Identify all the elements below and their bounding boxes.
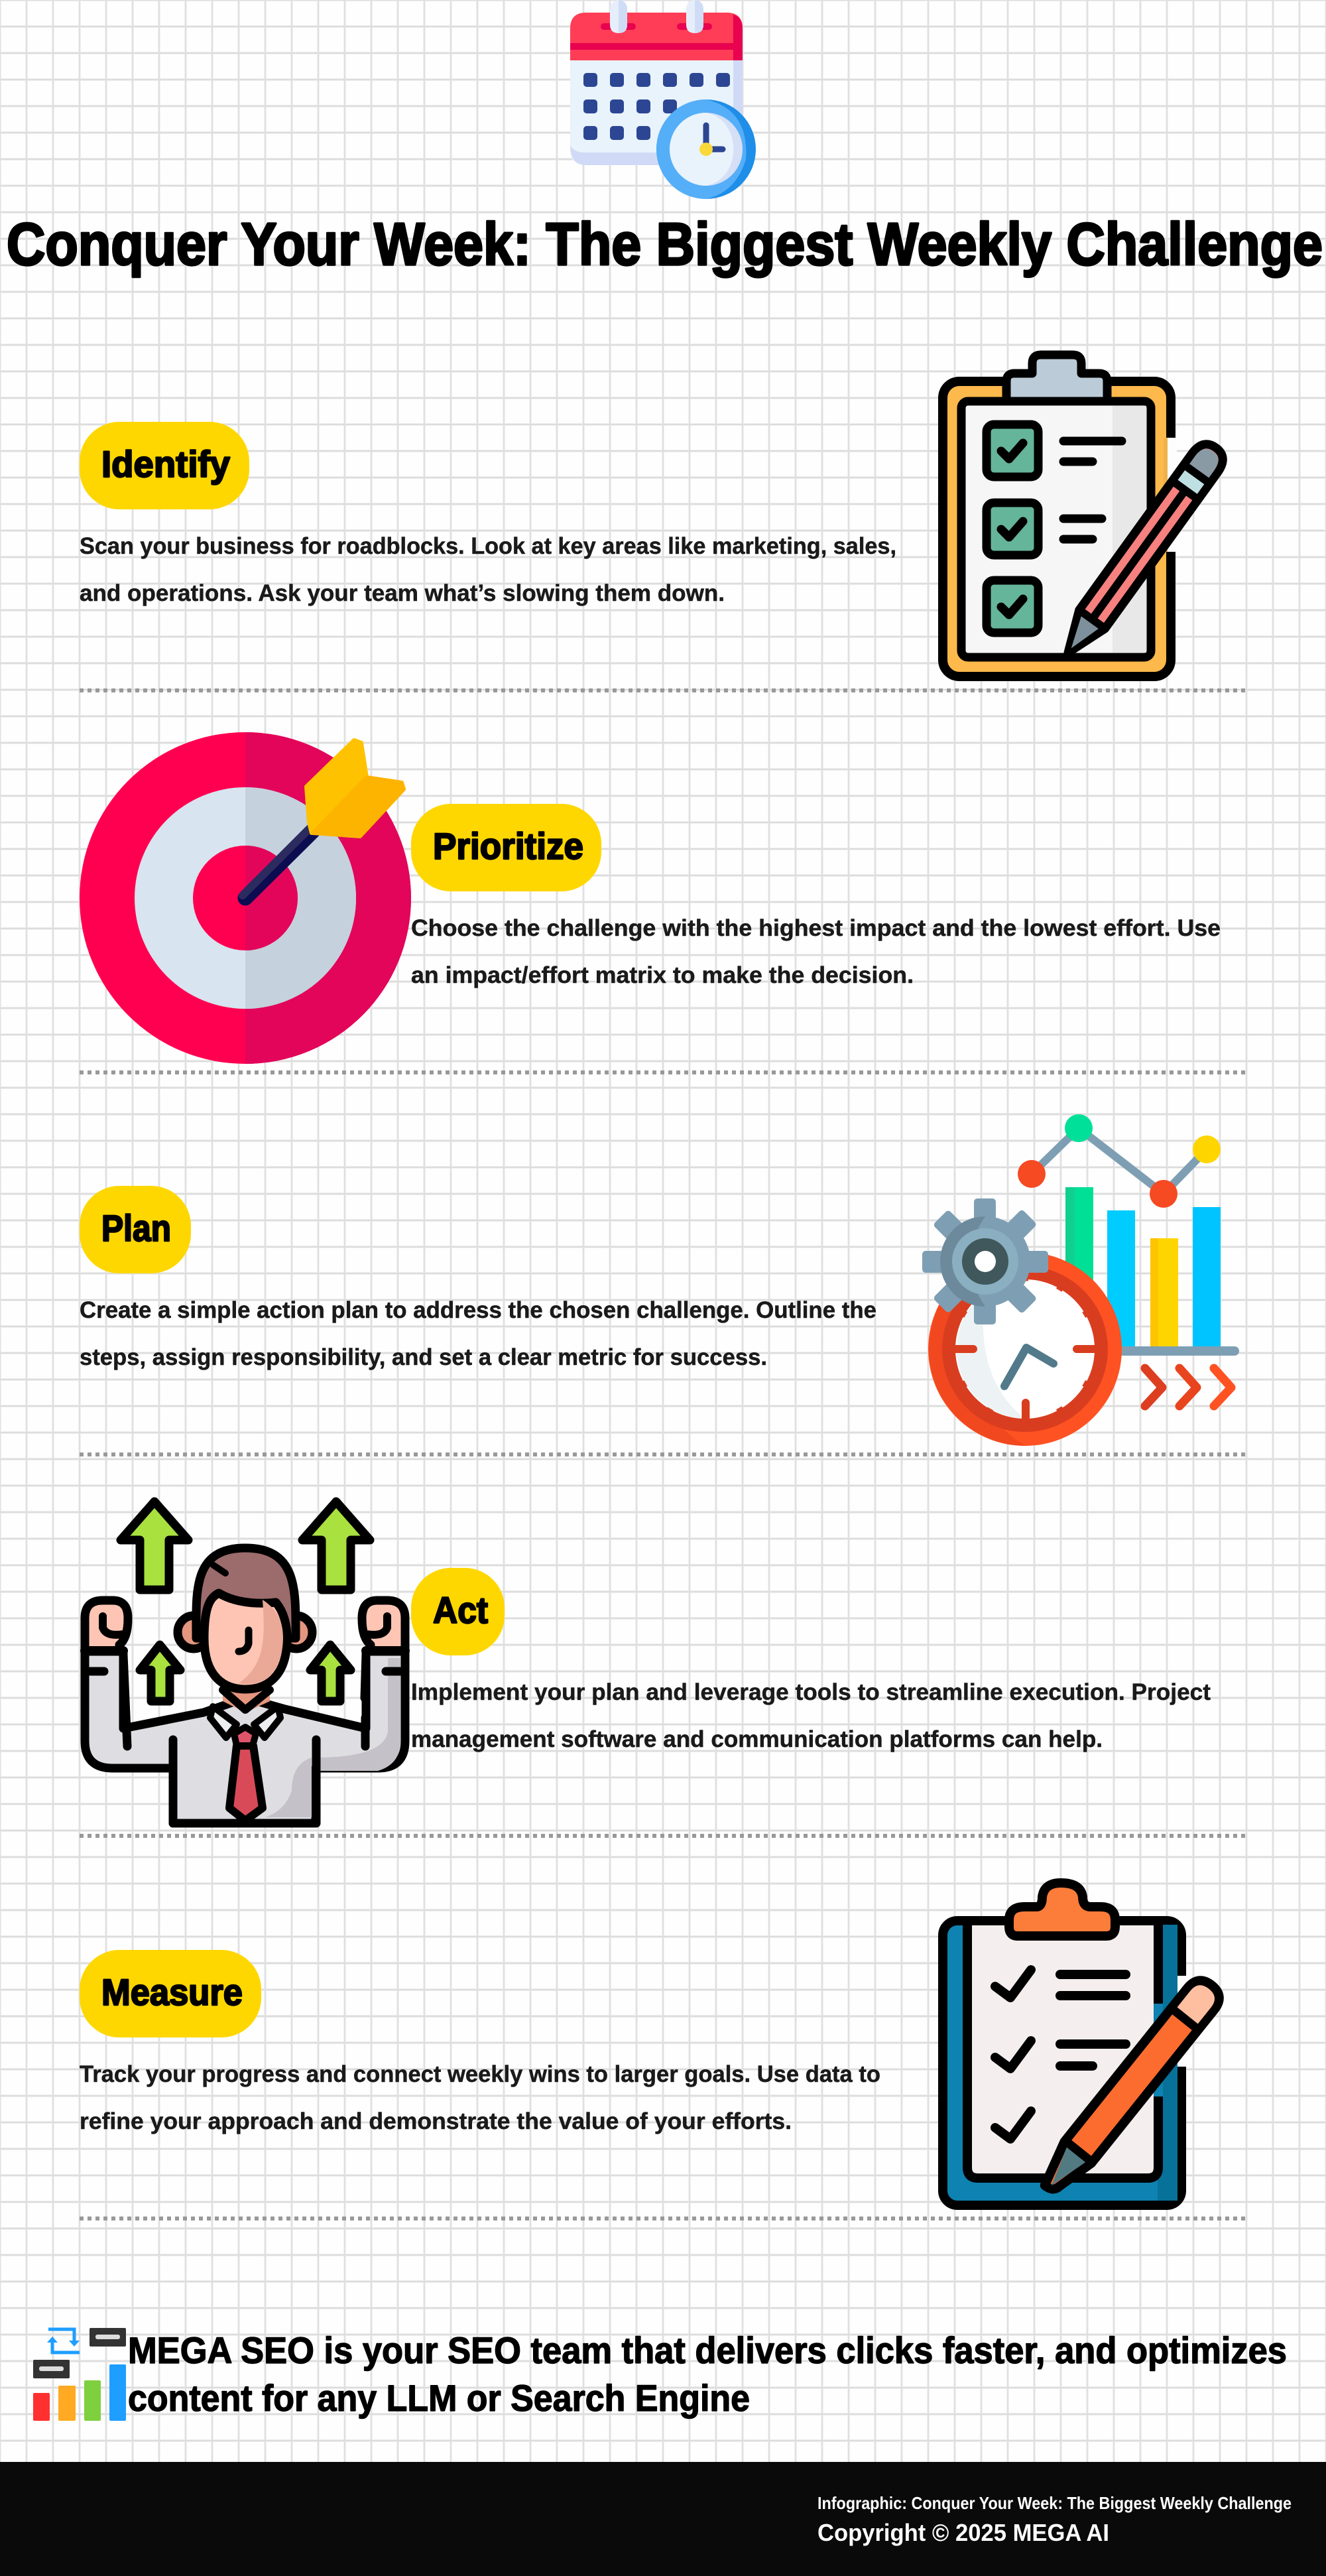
icon: charts, clock and gear bbox=[922, 1114, 1239, 1446]
panel: Identify bbox=[80, 355, 1229, 676]
panel: Plan bbox=[80, 1114, 1239, 1446]
text: Measure description: Track your progress and connect weekly wins to larger goals. Use data to bbox=[80, 2061, 880, 2087]
badge: Act: Act bbox=[433, 1589, 488, 1631]
icon: clipboard with pen bbox=[943, 1883, 1225, 2205]
text: Identify description bbox=[80, 533, 896, 606]
text: Act description bbox=[411, 1679, 1211, 1752]
badge: Identify bbox=[80, 422, 249, 509]
text: Plan description bbox=[80, 1297, 876, 1370]
text: Prioritize description bbox=[411, 915, 1221, 988]
badge: Identify: Identify bbox=[101, 443, 230, 485]
text: Plan description: steps, assign responsibility, and set a clear metric for success. bbox=[80, 1344, 767, 1370]
badge: Prioritize: Prioritize bbox=[433, 825, 583, 867]
text: Act description: management software and communication platforms can help. bbox=[411, 1726, 1103, 1752]
text: MEGA SEO message bbox=[128, 2329, 1287, 2419]
badge: Measure bbox=[80, 1950, 261, 2037]
badge: Plan: Plan bbox=[101, 1207, 171, 1249]
text: Prioritize description: an impact/effort matrix to make the decision. bbox=[411, 962, 914, 988]
text: Measure description bbox=[80, 2061, 880, 2134]
footer copyright: Copyright © 2025 MEGA AI bbox=[817, 2519, 1109, 2546]
header icon: calendar with clock bbox=[570, 0, 756, 199]
text: Act description: Implement your plan and leverage tools to streamline execution. Project bbox=[411, 1679, 1211, 1705]
text: Identify description: and operations. Ask your team what’s slowing them down. bbox=[80, 580, 725, 606]
badge: Measure: Measure bbox=[101, 1971, 243, 2013]
badge: Prioritize bbox=[411, 804, 601, 891]
panel: Act bbox=[85, 1502, 1211, 1823]
call to action bbox=[33, 2328, 1287, 2421]
icon: businessman with arrows bbox=[85, 1502, 405, 1823]
icon: MEGA SEO logo bbox=[33, 2328, 126, 2421]
icon: checklist clipboard with pencil bbox=[943, 355, 1229, 676]
badge: Act bbox=[411, 1568, 505, 1655]
panel: Measure bbox=[80, 1883, 1225, 2205]
text: Measure description: refine your approach and demonstrate the value of your efforts. bbox=[80, 2108, 792, 2134]
text: MEGA SEO message: content for any LLM or Search Engine bbox=[128, 2377, 750, 2419]
text: Identify description: Scan your business for roadblocks. Look at key areas like marketing, sales, bbox=[80, 533, 896, 559]
panel: Prioritize bbox=[80, 732, 1221, 1064]
footer bbox=[0, 2462, 1326, 2576]
text: Prioritize description: Choose the challenge with the highest impact and the lowest effort. Use bbox=[411, 915, 1221, 941]
text: Plan description: Create a simple action plan to address the chosen challenge. Outline the bbox=[80, 1297, 876, 1323]
badge: Plan bbox=[80, 1186, 191, 1273]
icon: target with dart bbox=[80, 732, 411, 1064]
